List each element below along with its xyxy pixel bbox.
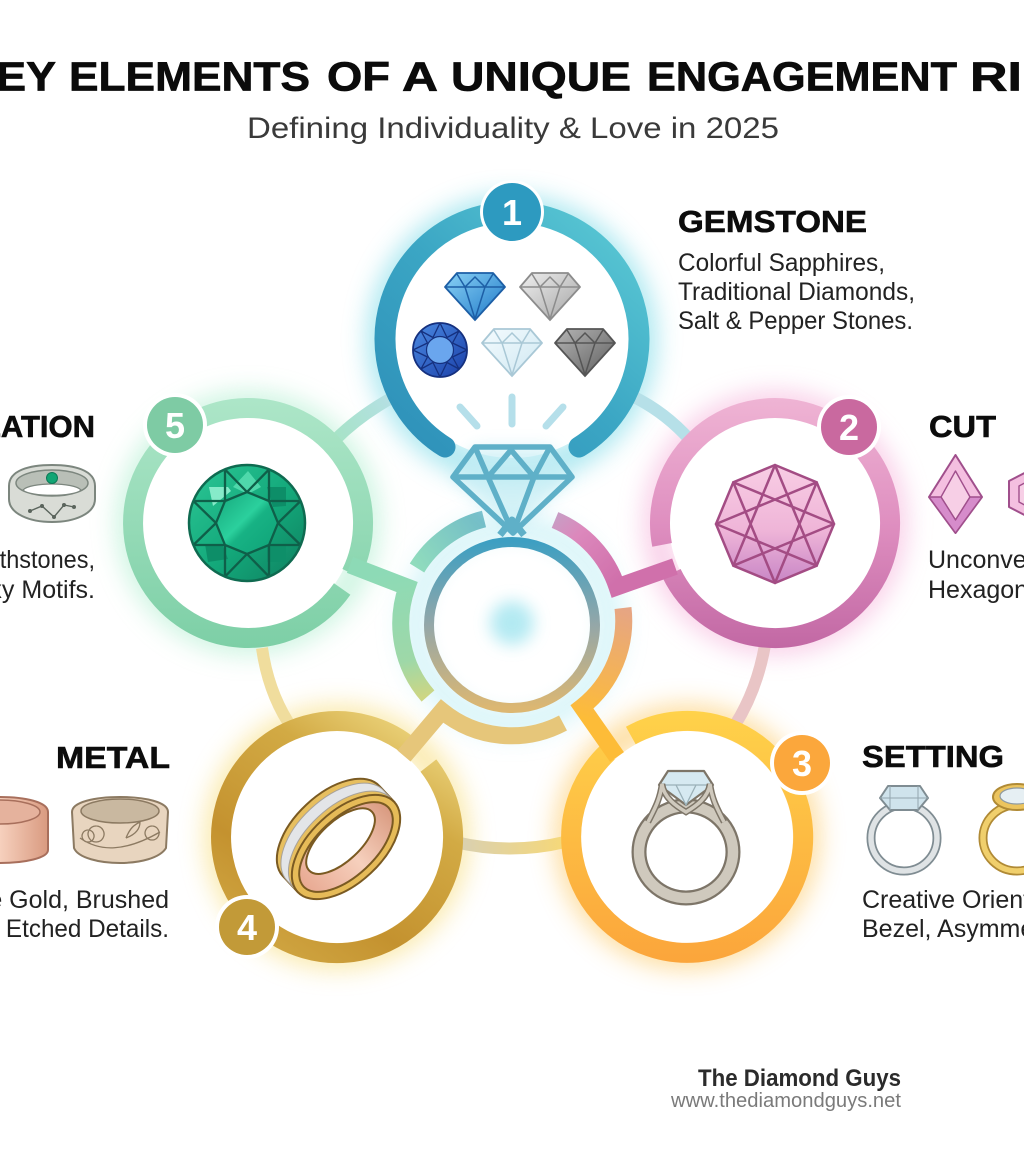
text block: gemstone: Salt & Pepper Stones. [678,307,913,335]
text block: setting [862,739,1024,943]
emerald gem [189,465,305,581]
title: A [402,54,438,100]
title: OF [327,54,390,100]
icon: hexagon cut [1009,468,1024,520]
icon: brushed rose gold band [0,797,48,863]
solitaire ring [639,771,733,898]
gem: salt and pepper diamond [555,329,615,376]
title: ELEMENTS [69,54,310,100]
panel: cut circle [660,395,890,638]
title [0,54,1024,100]
panel: metal circle [215,721,453,959]
badge 5: 5 [165,405,185,446]
ring band [429,542,595,708]
brand footer: www.thediamondguys.net [670,1090,901,1112]
text block: personalization [0,409,95,604]
text block: metal [0,740,170,943]
ring [133,408,363,638]
text block: cut [928,409,1024,604]
title: UNIQUE [451,54,631,100]
gem: clear diamond [482,329,542,376]
gem: gray diamond [520,273,580,320]
sparkle rays [460,397,563,426]
brand footer [670,1065,901,1112]
badge 2: 2 [839,407,859,448]
pink octagon gem [716,465,834,583]
tri-tone band [258,760,419,918]
panel: setting circle [571,721,834,953]
badge 3 [770,731,834,795]
panel: gemstone circle [385,180,639,458]
badge 2 [817,395,881,459]
central diamond [453,447,572,535]
badge 3: 3 [792,743,812,784]
ring centre glow [428,541,596,709]
subtitle: Defining Individuality & Love in 2025 [247,112,779,145]
text block: gemstone: GEMSTONE [678,204,867,239]
badge 4 [215,895,279,959]
diamond glow [453,447,572,533]
text block: cut: CUT [929,409,996,444]
gem: blue diamond [445,273,505,320]
icon: kite cut [929,455,982,533]
icon: gold bezel ring [983,784,1024,871]
text block: gemstone: Traditional Diamonds, [678,278,915,306]
ring segment [385,212,639,447]
text block: gemstone: Colorful Sapphires, [678,249,885,277]
badge 5 [143,393,207,457]
badge 4: 4 [237,907,257,948]
icon: silver east-west ring [871,786,937,871]
icon: etched band [72,797,168,863]
text block: setting: SETTING [862,739,1004,774]
icon: constellation ring [9,465,95,522]
text block: gemstone [678,204,915,335]
central ring icon [428,447,596,709]
ring [660,408,890,638]
ring [571,721,803,953]
faint connecting lines between outer circles [262,396,765,848]
badge 1: 1 [502,192,522,233]
inner segmented arcs and connectors [350,519,675,757]
brand footer: The Diamond Guys [698,1065,901,1092]
badge 1 [480,180,544,244]
title: ENGAGEMENT [647,54,957,100]
gem: round sapphire [413,323,467,377]
ring [221,721,453,953]
panel: personalization circle [133,393,363,638]
text block: metal: METAL [56,740,170,775]
glow layer [130,210,893,955]
